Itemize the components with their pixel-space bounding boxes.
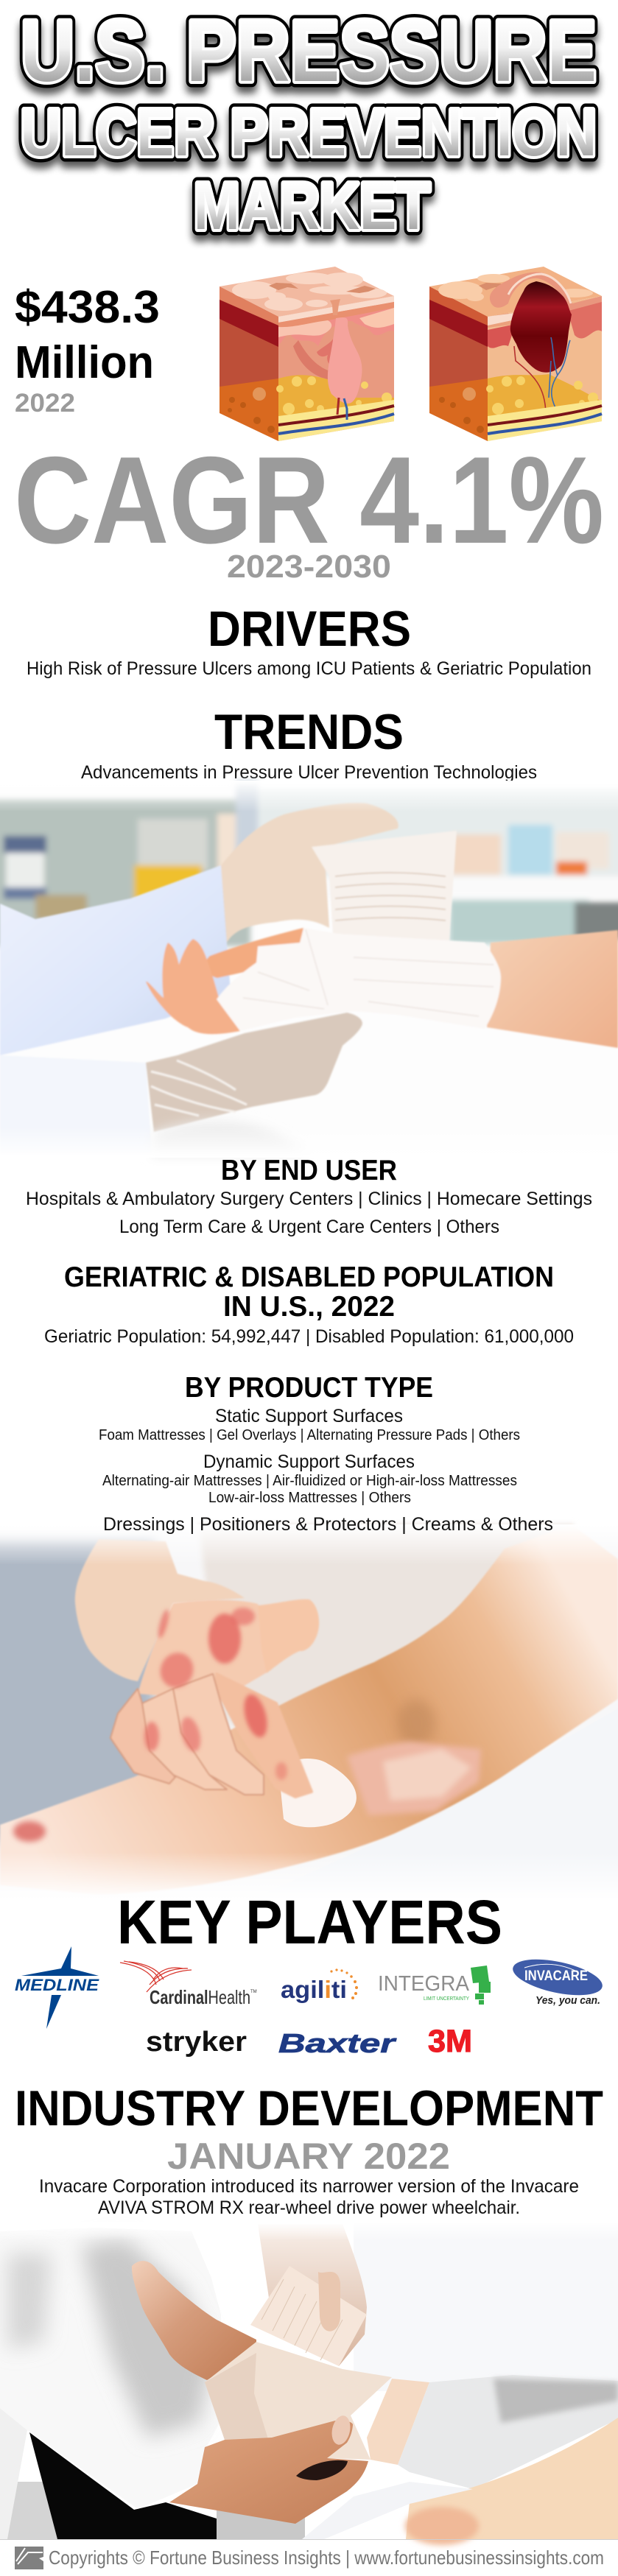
market size stat [15, 282, 160, 418]
logo: Invacare: INVACARE [524, 1968, 588, 1984]
by product type section: Dynamic Support Surfaces [203, 1451, 415, 1472]
title [21, 3, 597, 244]
icon: ulcerated skin cross-section [429, 267, 602, 441]
market size stat: 2022 [15, 389, 75, 418]
market size stat: $438.3 [15, 282, 160, 333]
geriatric and disabled population section: IN U.S., 2022 [223, 1291, 395, 1323]
photo: bandaged ankle [0, 2222, 618, 2545]
logo: Integra [378, 1966, 491, 2005]
logo: Invacare [510, 1953, 605, 2007]
logo: Medline: MEDLINE [15, 1976, 100, 1994]
photo: bandaged hand [0, 781, 618, 1158]
title: MARKET [194, 170, 430, 244]
industry development section: JANUARY 2022 [167, 2136, 450, 2177]
industry development section: AVIVA STROM RX rear-wheel drive power wheelchair. [98, 2197, 520, 2218]
dressings line: Dressings | Positioners & Protectors | Creams & Others [103, 1514, 553, 1535]
market size stat: Million [15, 337, 154, 388]
drivers section: High Risk of Pressure Ulcers among ICU Patients & Geriatric Population [27, 658, 591, 679]
by end user section: Long Term Care & Urgent Care Centers | Others [119, 1217, 499, 1237]
geriatric and disabled population section [44, 1261, 574, 1347]
trends section: Advancements in Pressure Ulcer Prevention Technologies [81, 762, 537, 783]
logo: Baxter: Baxter [278, 2028, 397, 2058]
by end user section [26, 1155, 592, 1237]
logo: Stryker: stryker [146, 2027, 247, 2058]
logo: Cardinal Health: TM [250, 1990, 257, 1994]
logo: Agiliti [281, 1968, 358, 2003]
by product type section: Foam Mattresses | Gel Overlays | Alternating Pressure Pads | Others [99, 1427, 520, 1443]
title: MARKET [194, 170, 430, 244]
by end user section: BY END USER [221, 1155, 397, 1186]
photo: cream applied on arm [0, 1524, 618, 1900]
logo: Medline [15, 1946, 100, 2029]
title: MARKET [194, 170, 430, 244]
key players heading: KEY PLAYERS [117, 1887, 502, 1957]
logo: Cardinal Health [120, 1961, 257, 2008]
logo: Invacare: Yes, you can. [536, 1994, 600, 2007]
by product type section: Alternating-air Mattresses | Air-fluidized or High-air-loss Mattresses [102, 1473, 517, 1489]
by product type section [99, 1372, 520, 1506]
geriatric and disabled population section: GERIATRIC & DISABLED POPULATION [64, 1261, 554, 1293]
trends section [81, 704, 537, 783]
by end user section: Hospitals & Ambulatory Surgery Centers | Clinics | Homecare Settings [26, 1189, 592, 1209]
logo: Agiliti: agiliti [281, 1976, 347, 2003]
logo: 3M: 3M [428, 2024, 472, 2059]
drivers section [27, 601, 591, 679]
logo: Integra: LIMIT UNCERTAINTY [424, 1996, 469, 2002]
logo: Integra: INTEGRA [378, 1972, 470, 1996]
by product type section: Low-air-loss Mattresses | Others [208, 1490, 411, 1506]
industry development section: Invacare Corporation introduced its narrower version of the Invacare [39, 2176, 579, 2197]
logo: Cardinal Health: CardinalHealth [150, 1986, 250, 2008]
industry development section [15, 2080, 603, 2218]
geriatric and disabled population section: Geriatric Population: 54,992,447 | Disabled Population: 61,000,000 [44, 1326, 574, 1347]
icon: healthy skin cross-section [220, 267, 394, 441]
by product type section: Static Support Surfaces [215, 1406, 403, 1426]
CAGR figure: 2023-2030 [227, 549, 391, 585]
by product type section: BY PRODUCT TYPE [185, 1372, 433, 1404]
trends section: TRENDS [214, 704, 404, 760]
drivers section: DRIVERS [208, 601, 411, 657]
